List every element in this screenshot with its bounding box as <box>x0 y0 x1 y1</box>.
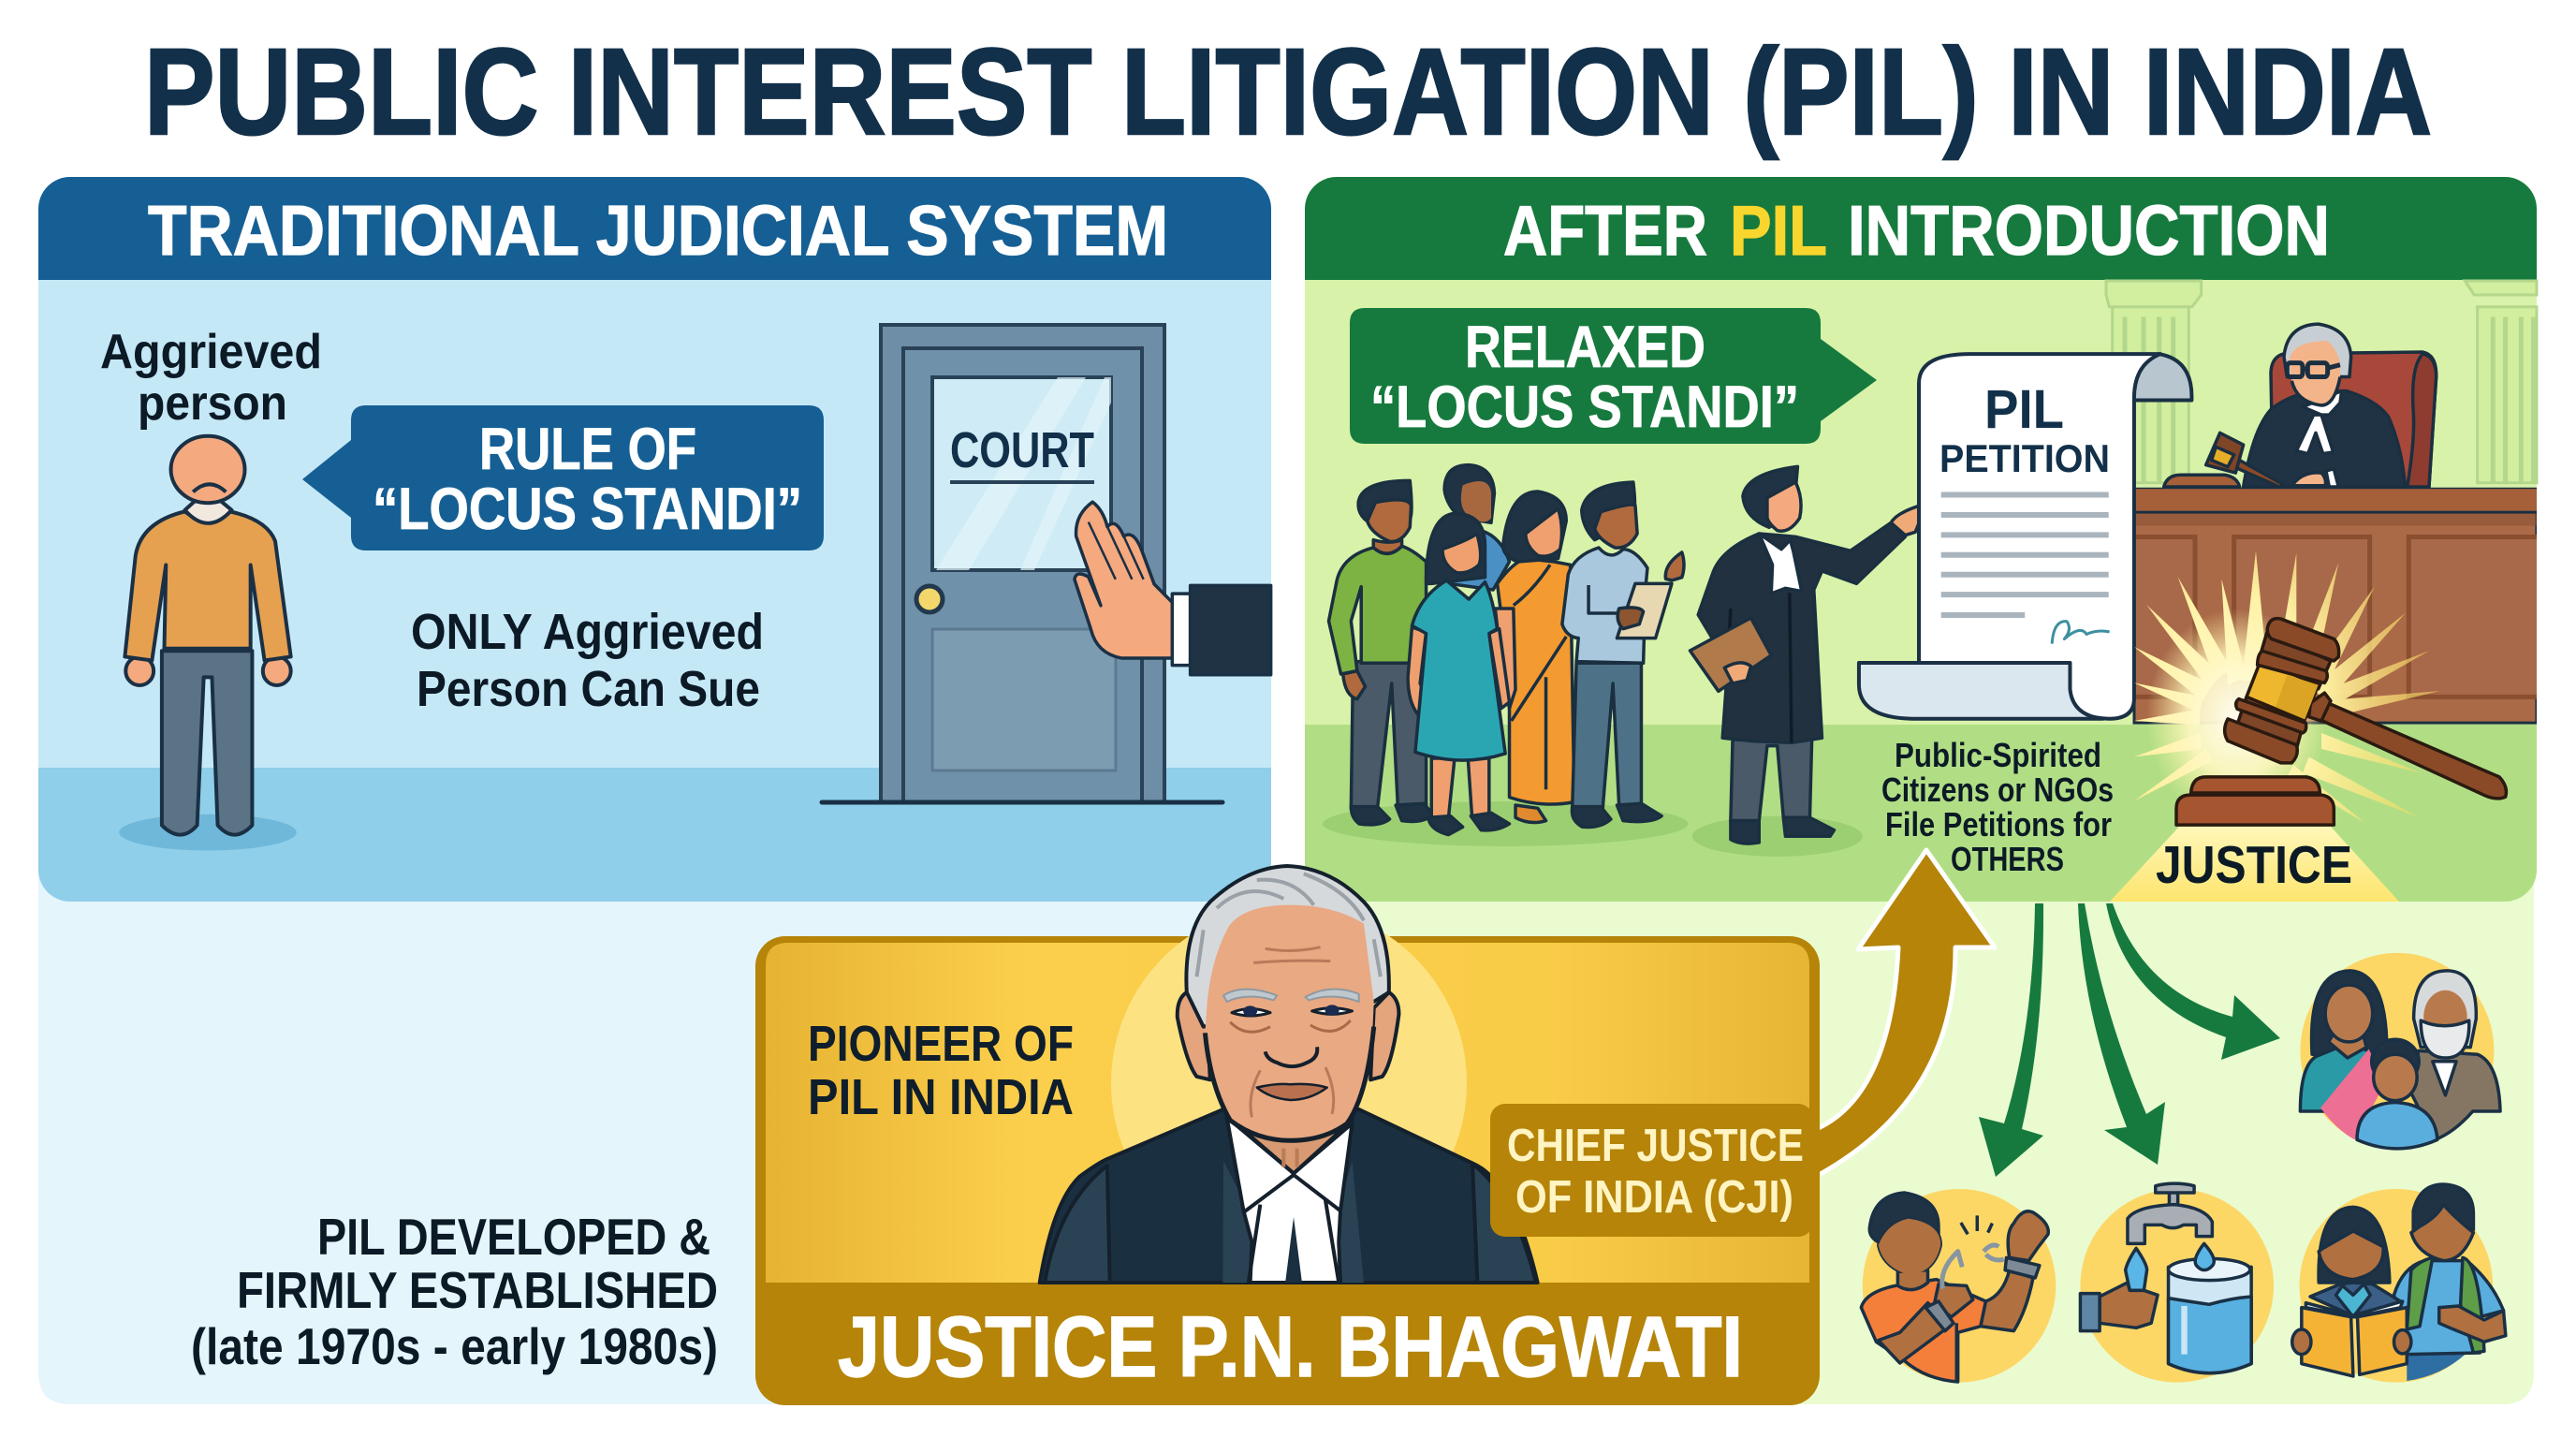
icon: family beneficiaries <box>2300 953 2500 1149</box>
text: PIL developed and established: (late 1970s - early 1980s) <box>191 1317 718 1375</box>
heading: after PIL introduction <box>1503 191 2330 270</box>
background: lower left pale blue <box>38 871 1288 1404</box>
icon: students beneficiaries <box>2292 1184 2506 1383</box>
badge: chief justice of India: OF INDIA (CJI) <box>1515 1172 1793 1223</box>
badge: chief justice of India <box>1490 1104 1813 1237</box>
callout: relaxed locus standi: RELAXED <box>1465 315 1705 380</box>
heading: after PIL introduction: PIL <box>1730 191 1827 270</box>
text: public-spirited citizens: Public-Spirited <box>1895 736 2101 774</box>
heading: traditional judicial system: TRADITIONAL JUDICIAL SYSTEM <box>148 191 1168 270</box>
callout: rule of locus standi: RULE OF <box>479 417 696 482</box>
text: only aggrieved person can sue <box>411 604 764 717</box>
decoration: glow behind portrait <box>1111 905 1467 1261</box>
name banner: Justice P.N. Bhagwati: JUSTICE P.N. BHAGWATI <box>838 1299 1743 1395</box>
icon: gavel with sunburst <box>2134 550 2506 825</box>
label: PIL petition: PIL <box>1984 379 2064 440</box>
icon: lawyer in robe <box>1690 466 1925 857</box>
portrait: Justice Bhagwati <box>1040 866 1538 1283</box>
callout: rule of locus standi: “LOCUS STANDI” <box>373 477 802 542</box>
label: aggrieved person: person <box>138 376 287 431</box>
label: court: COURT <box>950 422 1094 478</box>
text: public-spirited citizens: OTHERS <box>1951 840 2064 878</box>
text: pioneer of PIL in India: PIONEER OF <box>808 1016 1074 1072</box>
panel: after PIL introduction <box>1305 177 2539 902</box>
callout: rule of locus standi <box>302 405 824 550</box>
text: pioneer of PIL in India: PIL IN INDIA <box>808 1069 1074 1125</box>
text: only aggrieved person can sue: ONLY Aggrieved <box>411 604 764 660</box>
label: justice on light beam: JUSTICE <box>2156 835 2352 895</box>
heading: after PIL introduction: AFTER <box>1503 191 1707 270</box>
icon: clean water beneficiary <box>2080 1183 2274 1383</box>
decoration: courtroom columns <box>2106 281 2537 483</box>
label: PIL petition: PETITION <box>1939 436 2110 480</box>
text: PIL developed and established: PIL DEVELOPED & <box>317 1208 710 1266</box>
text: public-spirited citizens <box>1881 736 2114 878</box>
text: only aggrieved person can sue: Person Can Sue <box>417 661 760 717</box>
icon: gold arrow from CJI to PIL <box>1807 850 1995 1181</box>
icon: court door <box>822 325 1222 802</box>
label: aggrieved person <box>100 325 322 431</box>
badge: chief justice of India: CHIEF JUSTICE <box>1507 1121 1804 1171</box>
icon: stop hand and sleeve <box>1075 502 1271 675</box>
icon: broken chains beneficiary <box>1861 1189 2056 1383</box>
text: public-spirited citizens: Citizens or NGOs <box>1881 770 2114 809</box>
panel: PN Bhagwati card <box>755 866 1820 1405</box>
label: aggrieved person: Aggrieved <box>100 325 322 379</box>
icon: courtroom bench <box>2134 489 2539 723</box>
text: PIL developed and established: FIRMLY ESTABLISHED <box>237 1261 718 1319</box>
text: public-spirited citizens: File Petitions for <box>1885 805 2112 844</box>
callout: relaxed locus standi <box>1350 308 1877 444</box>
text: pioneer of PIL in India <box>808 1016 1074 1125</box>
icon: judge at bench <box>2164 324 2437 487</box>
label: justice on light beam <box>2110 827 2399 902</box>
icon: citizens group <box>1323 465 1688 846</box>
arrows: impact branches <box>1979 903 2280 1177</box>
callout: relaxed locus standi: “LOCUS STANDI” <box>1370 374 1799 440</box>
panel: traditional judicial system <box>38 177 1271 902</box>
icon: PIL petition scroll <box>1859 354 2191 719</box>
text: PIL developed and established <box>191 1208 718 1375</box>
background: lower right pale green <box>1288 871 2534 1404</box>
heading: after PIL introduction: INTRODUCTION <box>1848 191 2330 270</box>
icon: aggrieved person figure <box>119 436 297 850</box>
label: PIL petition <box>1939 379 2110 480</box>
